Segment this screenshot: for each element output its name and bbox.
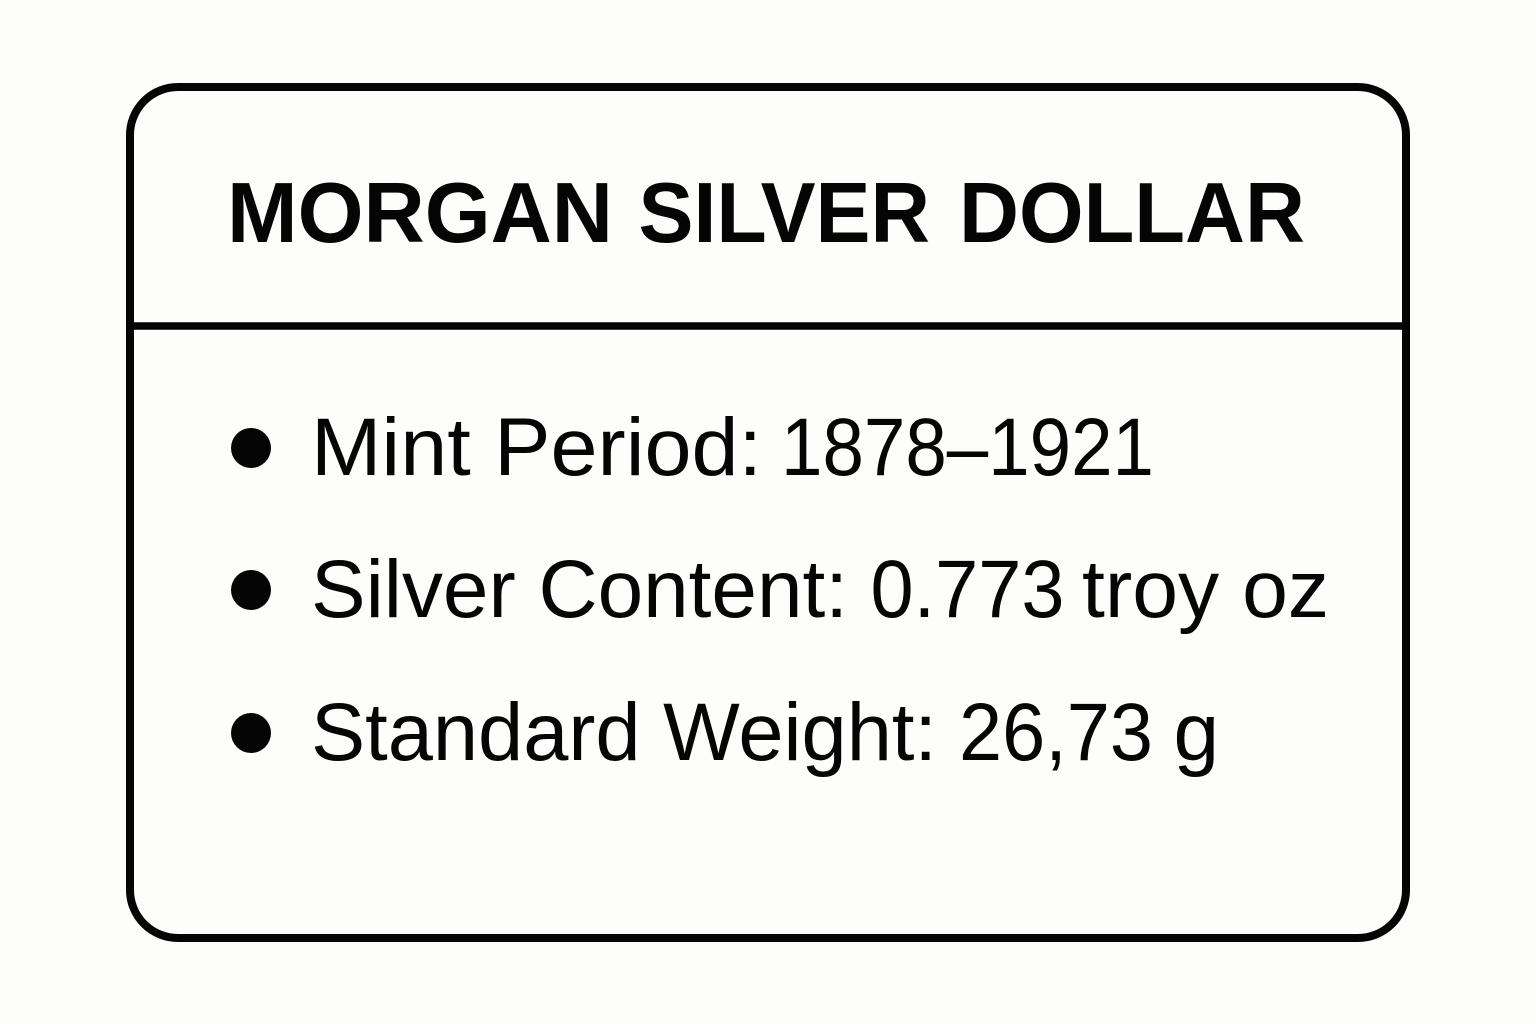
list item: standard weight: g: [1174, 687, 1219, 778]
title: SILVER: [638, 166, 930, 261]
list item: silver content: Silver Content:: [311, 544, 848, 635]
list item: silver content: troy oz: [1082, 544, 1329, 635]
panel: coin facts card: [130, 87, 1406, 938]
list item: mint period: Mint Period:: [311, 402, 762, 493]
title: MORGAN: [227, 166, 613, 261]
list item: mint period: [231, 402, 1154, 493]
list item: silver content: 0.773: [870, 544, 1064, 635]
list item: standard weight: [231, 687, 1219, 778]
title: DOLLAR: [959, 166, 1305, 261]
list item: standard weight: 26,73: [959, 687, 1153, 778]
list item: silver content: [231, 544, 1329, 635]
list item: standard weight: Standard Weight:: [311, 687, 937, 778]
list item: mint period: 1878–1921: [781, 402, 1154, 493]
